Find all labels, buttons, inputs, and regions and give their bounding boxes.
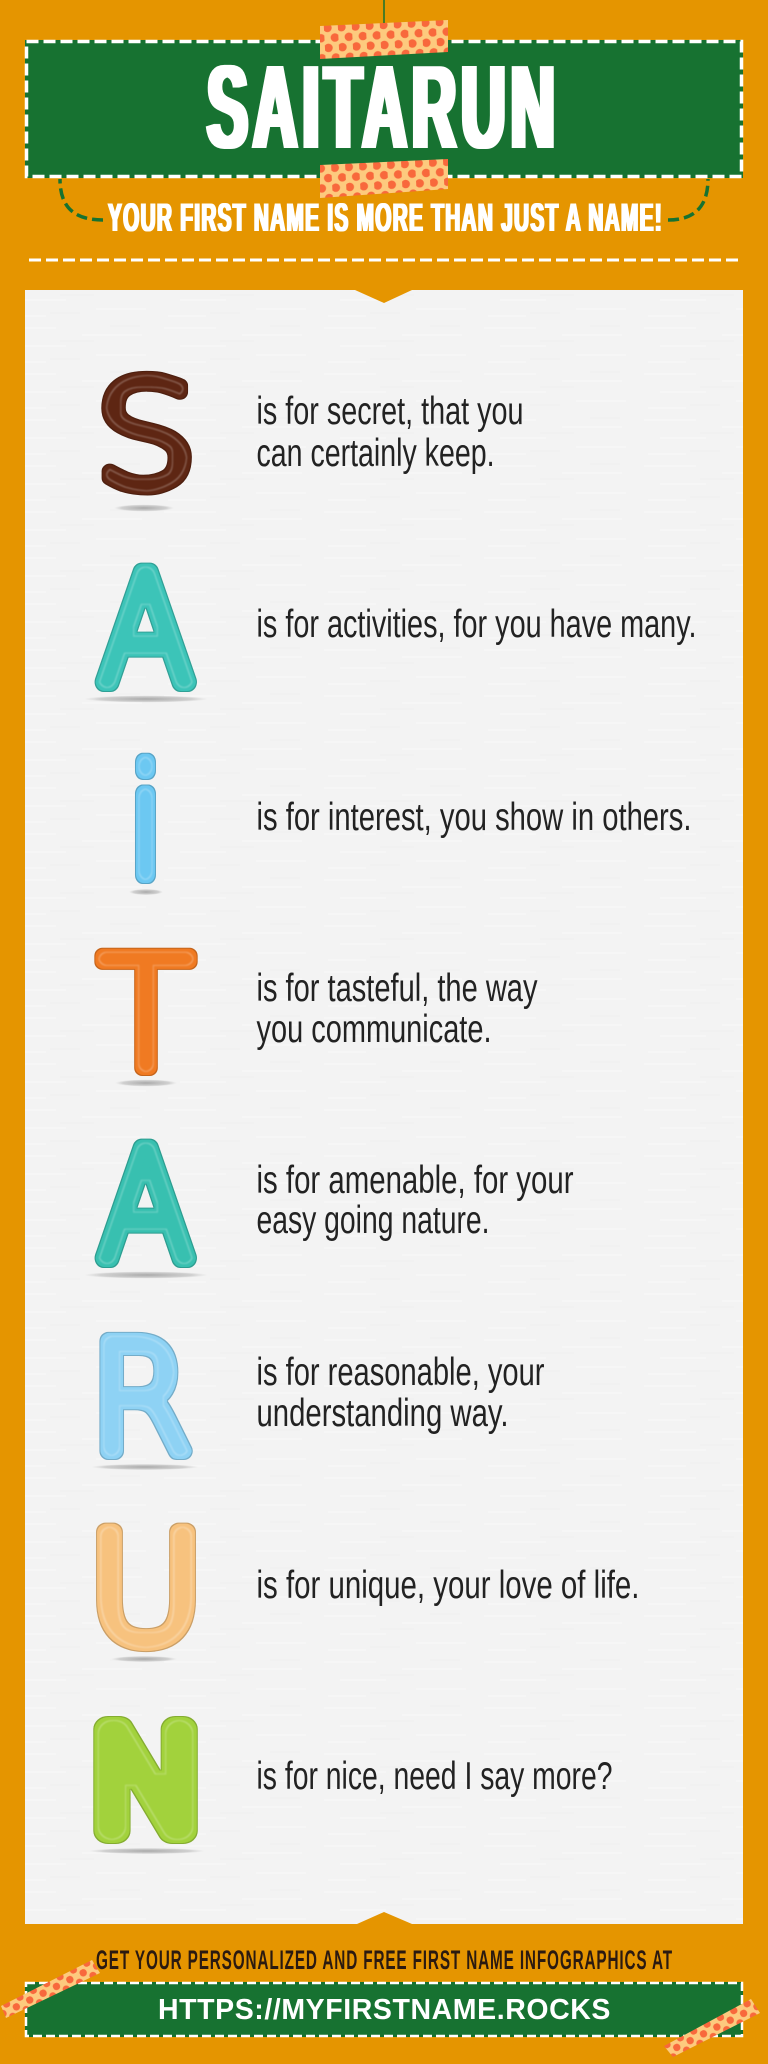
text: T line xyxy=(256,967,538,1051)
tape: top of banner xyxy=(320,20,448,59)
letter N: N xyxy=(89,1702,207,1865)
letter A (second): A xyxy=(100,1119,192,1294)
footer banner xyxy=(25,1982,743,2037)
text: A line (second): is for amenable, for your xyxy=(256,1159,574,1202)
tape: footer left xyxy=(1,1960,100,2018)
text: A line (second): easy going nature. xyxy=(256,1199,490,1242)
letter U: U xyxy=(88,1503,204,1677)
panel: letters xyxy=(25,290,743,1924)
text: U line: is for unique, your love of life. xyxy=(256,1564,640,1607)
letter R: R xyxy=(90,1312,192,1488)
text: T line: you communicate. xyxy=(256,1008,492,1051)
top notch xyxy=(355,290,412,303)
text: R line: understanding way. xyxy=(256,1392,508,1435)
letter i: i xyxy=(128,737,164,911)
letter T: T xyxy=(99,926,193,1105)
text: A line (second) xyxy=(256,1159,574,1242)
text: S line: is for secret, that you xyxy=(256,390,524,433)
dashed divider xyxy=(29,258,739,262)
title banner xyxy=(25,40,743,178)
letter S: S xyxy=(95,352,197,520)
tape: bottom of banner xyxy=(320,159,448,198)
left connector xyxy=(60,179,103,220)
text: S line: can certainly keep. xyxy=(256,432,494,475)
text: R line: is for reasonable, your xyxy=(256,1351,545,1394)
text: N line: is for nice, need I say more? xyxy=(256,1755,612,1798)
tape: footer right xyxy=(664,1999,760,2057)
bottom notch xyxy=(357,1912,412,1924)
letter A: A xyxy=(100,543,192,718)
right connector xyxy=(668,179,708,220)
text: T line: is for tasteful, the way xyxy=(256,967,538,1010)
hanging line xyxy=(383,0,385,25)
footer url: HTTPS://MYFIRSTNAME.ROCKS xyxy=(158,1994,611,2026)
text: S line xyxy=(256,390,524,475)
text: R line xyxy=(256,1351,545,1435)
